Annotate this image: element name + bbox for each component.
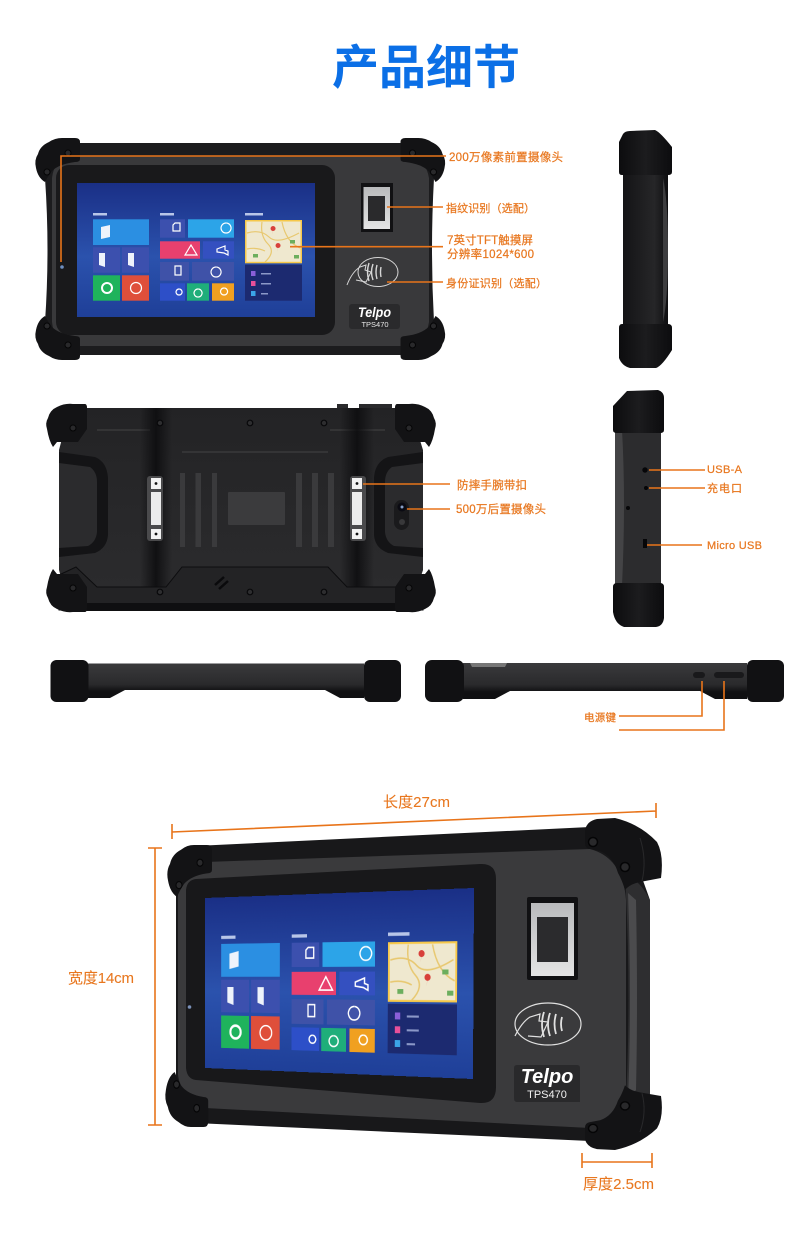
callout: touch screen: 7英寸TFT触摸屏 (447, 233, 533, 247)
tablet face (178, 849, 626, 1128)
callout: charging port: 充电口 (707, 481, 742, 495)
corner bumpers (46, 404, 436, 612)
screen bezel (56, 165, 335, 335)
tablet body (176, 827, 650, 1141)
touch screen UI (77, 183, 315, 317)
tablet side (625, 875, 650, 1118)
front camera (188, 1005, 191, 1009)
rear camera (394, 500, 409, 530)
right side grip (374, 452, 423, 557)
dimension: thickness (582, 1153, 654, 1193)
top edge buttons (337, 404, 392, 408)
panel: back view tablet (46, 404, 436, 612)
perspective tablet touch screen UI (205, 888, 474, 1079)
NFC icon (347, 258, 398, 286)
panel: front view tablet (35, 138, 445, 360)
left wrist strap buckle (147, 476, 163, 541)
cooling ribs (180, 473, 334, 547)
panel: top edge view with buttons (425, 660, 784, 702)
back body (59, 408, 423, 610)
power and volume buttons (693, 672, 705, 678)
callout: fingerprint: 指纹识别（选配） (446, 201, 535, 215)
panel: perspective tablet (165, 818, 662, 1150)
ports (626, 467, 648, 548)
corner bumpers (35, 138, 445, 360)
dimension: width: 宽度14cm (68, 970, 134, 987)
front camera (60, 265, 64, 269)
screws (157, 420, 327, 595)
callout: power key (584, 681, 702, 724)
panel: right side view (619, 130, 672, 368)
callouts: back view (363, 478, 546, 516)
Telpo badge (514, 1065, 580, 1102)
Telpo badge: Telpo (358, 304, 391, 320)
callout: ID card reader: 身份证识别（选配） (446, 276, 547, 290)
callout: front camera (61, 150, 563, 262)
callout: USB-A: USB-A (707, 464, 743, 476)
upper panel line (97, 430, 385, 452)
dimension: thickness: 厚度2.5cm (583, 1176, 654, 1193)
callout: Micro USB: Micro USB (707, 540, 762, 552)
left side grip (59, 452, 108, 557)
dimension: length: 长度27cm (383, 794, 450, 811)
corner bumpers (165, 818, 662, 1150)
Telpo badge (349, 304, 400, 329)
dimension: width (68, 848, 162, 1125)
bottom edge shadow (70, 603, 412, 611)
callout: power key: 电源键 (584, 711, 616, 724)
Telpo badge: TPS470 (361, 320, 389, 329)
central label plate (228, 492, 285, 525)
dimension: length (172, 794, 656, 839)
speaker grill (215, 577, 228, 589)
Telpo badge: Telpo (521, 1066, 573, 1088)
callouts: front view (61, 150, 563, 290)
fingerprint reader (527, 897, 578, 980)
callout: touch screen: 分辨率1024*600 (447, 247, 534, 261)
callouts: ports (647, 464, 762, 552)
callout: front camera: 200万像素前置摄像头 (449, 150, 563, 164)
callout: wrist strap: 防摔手腕带扣 (457, 478, 527, 492)
panel: bottom edge view (50, 660, 401, 702)
callout: touch screen (290, 233, 534, 261)
callout: rear camera: 500万后置摄像头 (456, 502, 546, 516)
strap channels (140, 408, 172, 610)
NFC icon (515, 1003, 581, 1045)
Telpo badge: TPS470 (527, 1089, 567, 1101)
lower panel (59, 567, 423, 610)
screen bezel (186, 864, 496, 1103)
panel: left side view with ports (613, 390, 664, 627)
callout: rear camera (407, 502, 546, 516)
tablet body (45, 143, 434, 355)
callout: volume key line (619, 681, 724, 730)
right wrist strap buckle (350, 476, 366, 541)
fingerprint reader (361, 183, 393, 232)
title: 产品细节 (332, 41, 520, 94)
tablet face (52, 156, 429, 346)
